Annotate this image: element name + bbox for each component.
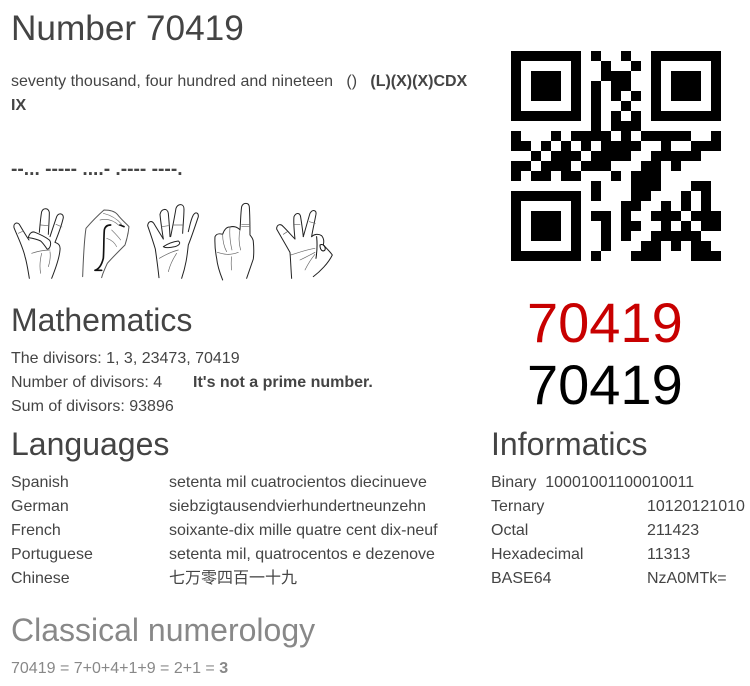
divisors text block: It's not a prime number. — [193, 374, 373, 391]
icon: hand digit 7 — [14, 209, 63, 278]
icon: hand digit 4 — [148, 205, 198, 278]
informatics table — [491, 474, 745, 587]
languages table: siebzigtausendvierhundertneunzehn — [169, 498, 426, 515]
informatics table: 211423 — [647, 522, 699, 539]
informatics table: 10120121010 — [647, 498, 745, 515]
morse code: --... ----- ....- .---- ----. — [11, 159, 183, 180]
informatics table: Hexadecimal — [491, 546, 583, 563]
divisors text block: The divisors: 1, 3, 23473, 70419 — [11, 350, 240, 367]
languages table: setenta mil, quatrocentos e dezenove — [169, 546, 435, 563]
informatics table: Ternary — [491, 498, 544, 515]
languages table: German — [11, 498, 69, 515]
numerology calculation: 70419 = 7+0+4+1+9 = 2+1 = 3 — [11, 660, 228, 677]
number in words and roman numeral: IX — [11, 97, 26, 114]
languages table: Spanish — [11, 474, 69, 491]
languages table: soixante-dix mille quatre cent dix-neuf — [169, 522, 438, 539]
heading: Informatics: Informatics — [491, 426, 647, 462]
languages table: French — [11, 522, 61, 539]
languages table: setenta mil cuatrocientos diecinueve — [169, 474, 427, 491]
heading: Languages: Languages — [11, 426, 169, 462]
languages table: Chinese — [11, 570, 70, 587]
informatics table: Binary 10001001100010011 — [491, 474, 694, 491]
informatics table: 11313 — [647, 546, 690, 563]
heading: Classical numerology: Classical numerology — [11, 612, 315, 648]
languages table: Portuguese — [11, 546, 93, 563]
icon: hand digit 1 — [215, 203, 254, 280]
icon: hand digit 0 — [83, 210, 129, 278]
informatics table: Octal — [491, 522, 528, 539]
title: Number 70419 — [11, 9, 244, 48]
red number: 70419 — [527, 291, 683, 354]
divisors text block: Sum of divisors: 93896 — [11, 398, 174, 415]
heading: Mathematics: Mathematics — [11, 302, 192, 338]
informatics table: BASE64 — [491, 570, 551, 587]
icon: hand digit 9 — [277, 211, 332, 278]
black number: 70419 — [527, 353, 683, 416]
divisors text block: Number of divisors: 4 — [11, 374, 162, 391]
number in words and roman numeral: seventy thousand, four hundred and nineteen () (L)(X)(X)CDX — [11, 73, 467, 90]
informatics table: NzA0MTk= — [647, 570, 727, 587]
divisors text block — [11, 350, 373, 415]
languages table — [11, 474, 438, 587]
languages table: 七万零四百一十九 — [169, 570, 297, 587]
number in words and roman numeral — [11, 73, 467, 114]
